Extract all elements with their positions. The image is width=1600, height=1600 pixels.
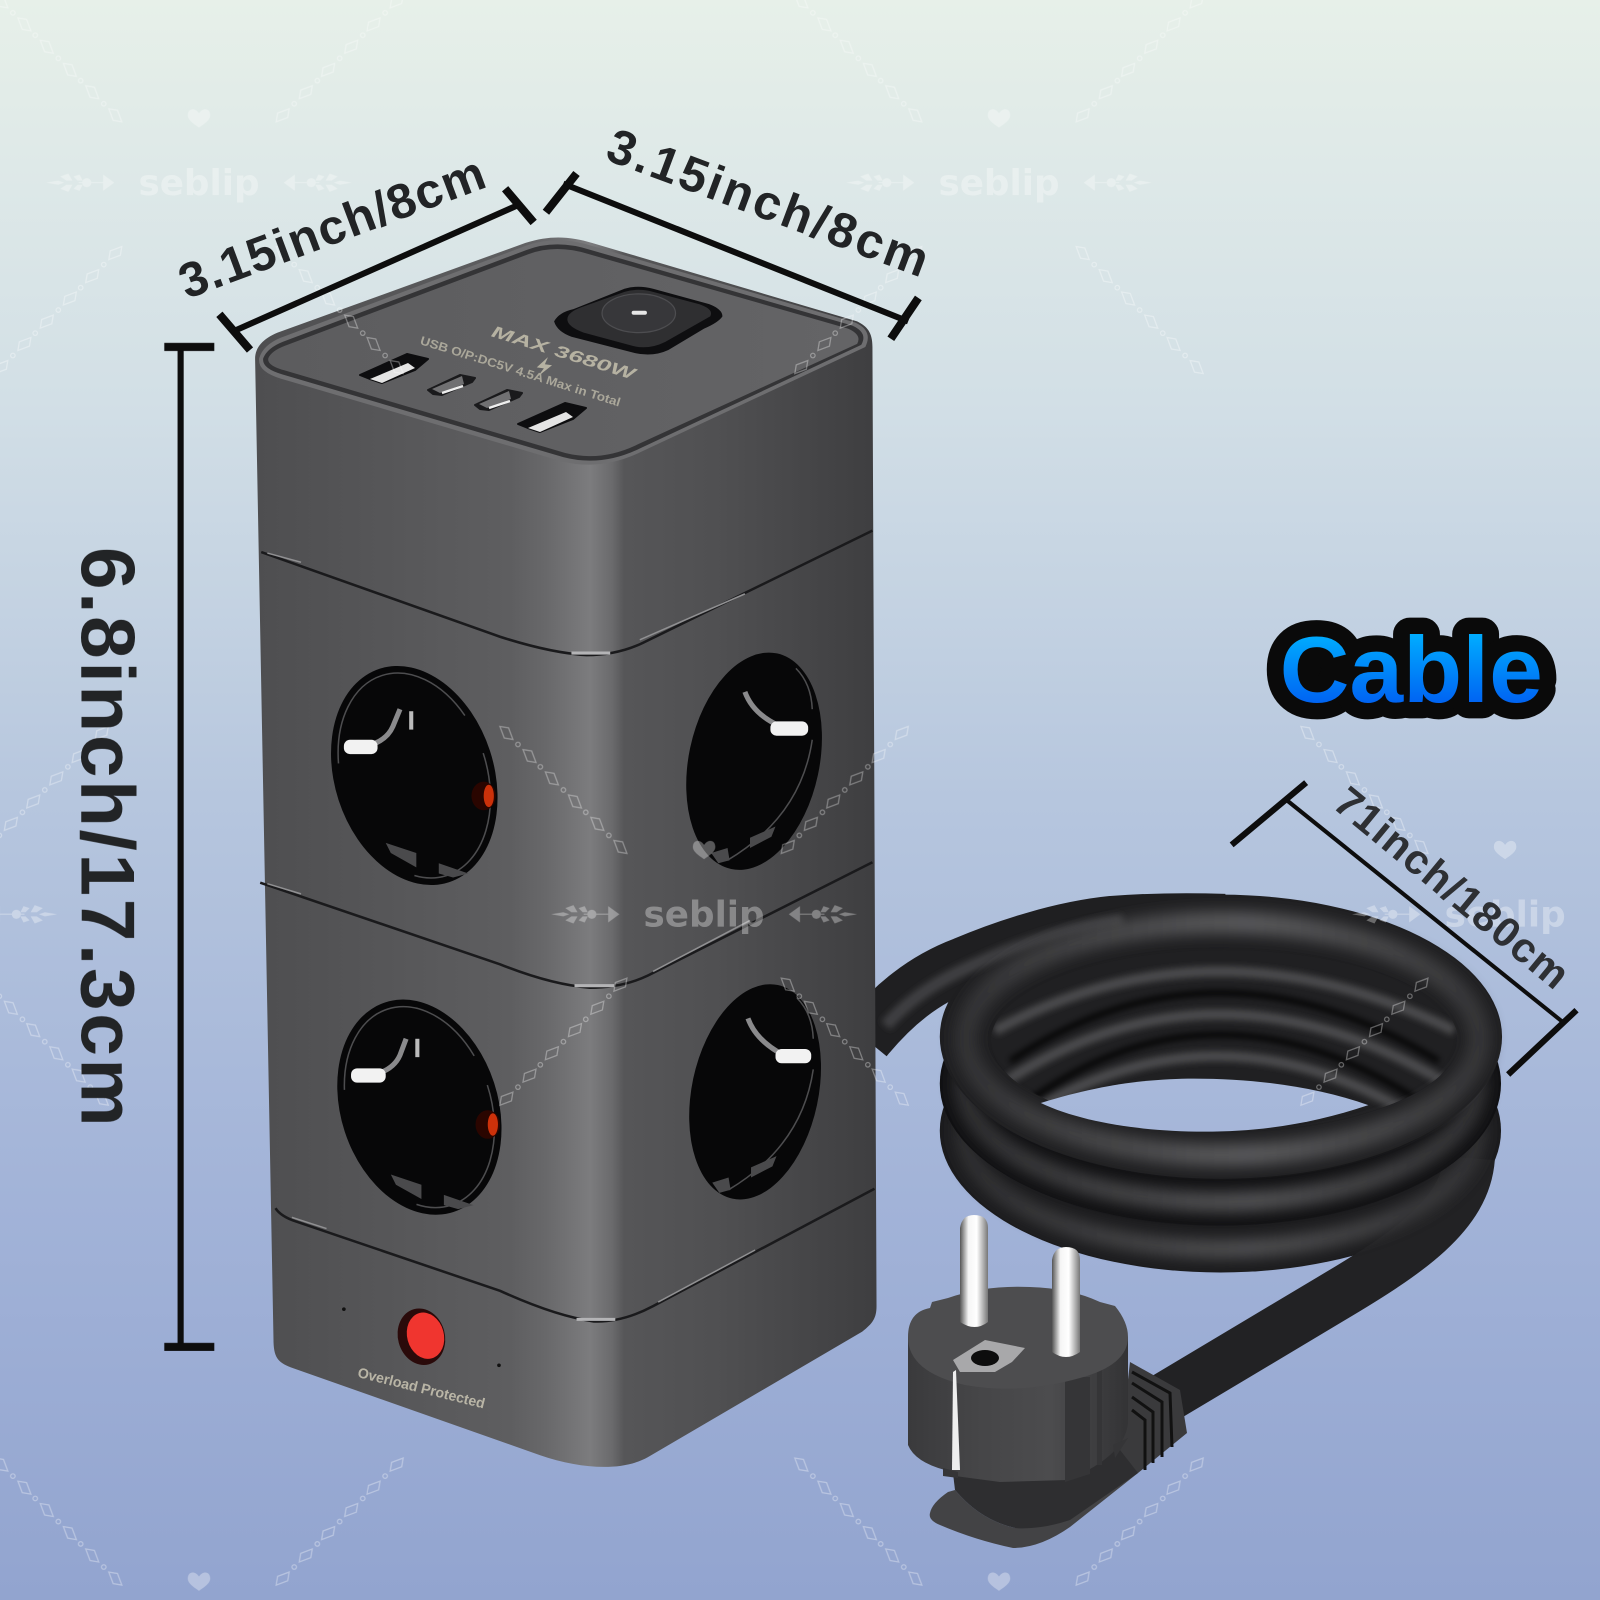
power switch: [554, 287, 722, 355]
watermark 4: seblip: [1445, 895, 1566, 936]
watermark 5: [0, 723, 112, 1109]
pin left: [960, 1215, 988, 1327]
cable heading: Cable: [1280, 617, 1543, 722]
overload indicator: [342, 1303, 501, 1370]
watermark 3: [496, 723, 912, 1109]
strain relief: [1120, 1362, 1187, 1473]
plug body grooves: [943, 1370, 1128, 1482]
usb-c port right: [475, 390, 522, 410]
usb-a port left: [360, 354, 428, 383]
cable rising from tower: [865, 921, 1224, 1039]
tower body: [255, 237, 877, 1467]
dimension: height: 6.8inch/17.3cm: [65, 547, 150, 1127]
dimension: cable length: [1232, 777, 1579, 1074]
usb-a port right: [518, 403, 586, 432]
inner back wall bands: [991, 953, 1458, 1132]
usb ports: [360, 354, 586, 432]
socket top left: [304, 644, 525, 907]
seams: [260, 531, 874, 1321]
top coil highlight: [965, 922, 1480, 1155]
watermark 7: [791, 1454, 1207, 1591]
socket top right: [667, 640, 841, 883]
watermark 6: [0, 1454, 407, 1591]
cable coil: [865, 895, 1502, 1414]
plug neck: [952, 1430, 1138, 1528]
dimension: width right: 3.15inch/8cm: [600, 119, 936, 288]
rising cable highlight: [886, 920, 1122, 1026]
watermark 2: [791, 0, 1207, 377]
usb-c port left: [428, 375, 475, 395]
watermark 1: seblip: [138, 163, 260, 204]
socket bottom left: [311, 978, 528, 1236]
dimension: width right: [546, 119, 936, 339]
ground contact: [952, 1340, 1025, 1470]
lowest coil: [940, 1107, 1501, 1272]
cable running to plug: [1138, 1158, 1469, 1414]
watermark 3: seblip: [644, 895, 765, 936]
overload protected label: Overload Protected: [356, 1365, 486, 1412]
watermark 1: [0, 0, 407, 377]
dimension: cable length: 71inch/180cm: [1325, 777, 1579, 998]
plug top face: [908, 1287, 1128, 1389]
usb output label: USB O/P:DC5V 4.5A Max in Total: [418, 334, 622, 409]
middle coil highlight: [949, 1075, 1492, 1220]
dimension: width left: 3.15inch/8cm: [172, 146, 493, 310]
plug body: [908, 1337, 1128, 1482]
plug foot: [930, 1465, 1138, 1548]
watermark 2: seblip: [938, 163, 1060, 204]
middle coil: [940, 942, 1501, 1226]
lowest coil highlight: [952, 1126, 1490, 1264]
max power label: MAX 3680W: [489, 323, 640, 384]
dimension: height: [65, 347, 214, 1347]
plug: [908, 1215, 1187, 1548]
watermark 4: [1297, 723, 1566, 1109]
pin right: [1052, 1247, 1080, 1357]
socket bottom right: [671, 972, 840, 1212]
top coil ring: [940, 895, 1502, 1179]
top face: [259, 240, 868, 465]
lightning bolt: [537, 357, 552, 377]
